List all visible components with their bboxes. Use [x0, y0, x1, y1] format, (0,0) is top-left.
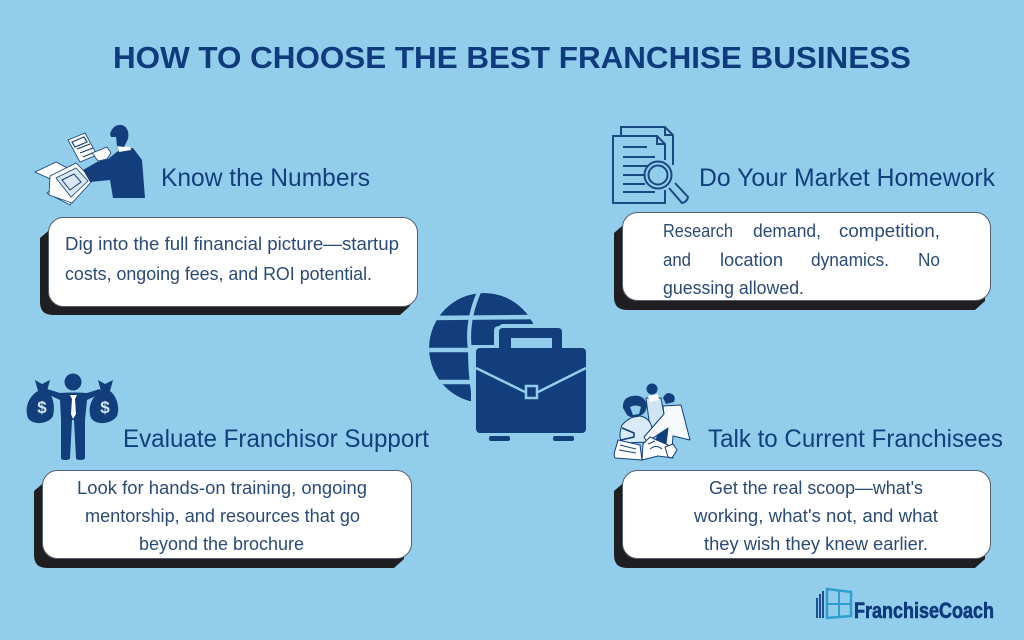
- card: Research: [663, 221, 733, 241]
- icon: man with calculator and papers: [35, 125, 145, 205]
- icon: globe and briefcase: [425, 292, 590, 441]
- panel: know the numbers: [35, 125, 418, 315]
- icon: group reading together: [614, 384, 690, 460]
- logo: FranchiseCoach: [817, 589, 994, 623]
- card: beyond the brochure: [139, 534, 304, 554]
- card: and: [663, 250, 691, 270]
- heading: Know the Numbers: [161, 164, 370, 192]
- icon: businessman holding money bags: [27, 374, 118, 460]
- card: costs, ongoing fees, and ROI potential.: [65, 264, 372, 284]
- card: [34, 470, 412, 568]
- card: mentorship, and resources that go: [85, 506, 360, 526]
- icon: businessman holding money bags: $: [37, 398, 47, 417]
- panel: evaluate franchisor support: [27, 374, 429, 568]
- logo: FranchiseCoach: FranchiseCoach: [854, 598, 994, 623]
- card: demand,: [753, 221, 821, 241]
- card: competition,: [839, 221, 940, 241]
- heading: Talk to Current Franchisees: [708, 425, 1003, 453]
- panel: do your market homework: [613, 127, 995, 310]
- heading: Evaluate Franchisor Support: [123, 425, 429, 453]
- card: Look for hands-on training, ongoing: [77, 478, 367, 498]
- card: working, what's not, and what: [693, 506, 938, 526]
- card: Get the real scoop—what's: [709, 478, 923, 498]
- card: [614, 212, 990, 310]
- icon: documents with magnifier: [613, 127, 688, 203]
- card: they wish they knew earlier.: [704, 534, 928, 554]
- card: dynamics.: [811, 250, 889, 270]
- card: [40, 218, 418, 315]
- heading: Do Your Market Homework: [699, 164, 995, 192]
- title: HOW TO CHOOSE THE BEST FRANCHISE BUSINESS: [113, 40, 911, 75]
- card: guessing allowed.: [663, 278, 804, 298]
- panel: talk to current franchisees: [614, 384, 1003, 568]
- card: No: [918, 250, 940, 270]
- card: [614, 470, 990, 568]
- card: Dig into the full financial picture—startup: [65, 234, 399, 254]
- card: location: [720, 250, 783, 270]
- icon: businessman holding money bags: $: [100, 398, 110, 417]
